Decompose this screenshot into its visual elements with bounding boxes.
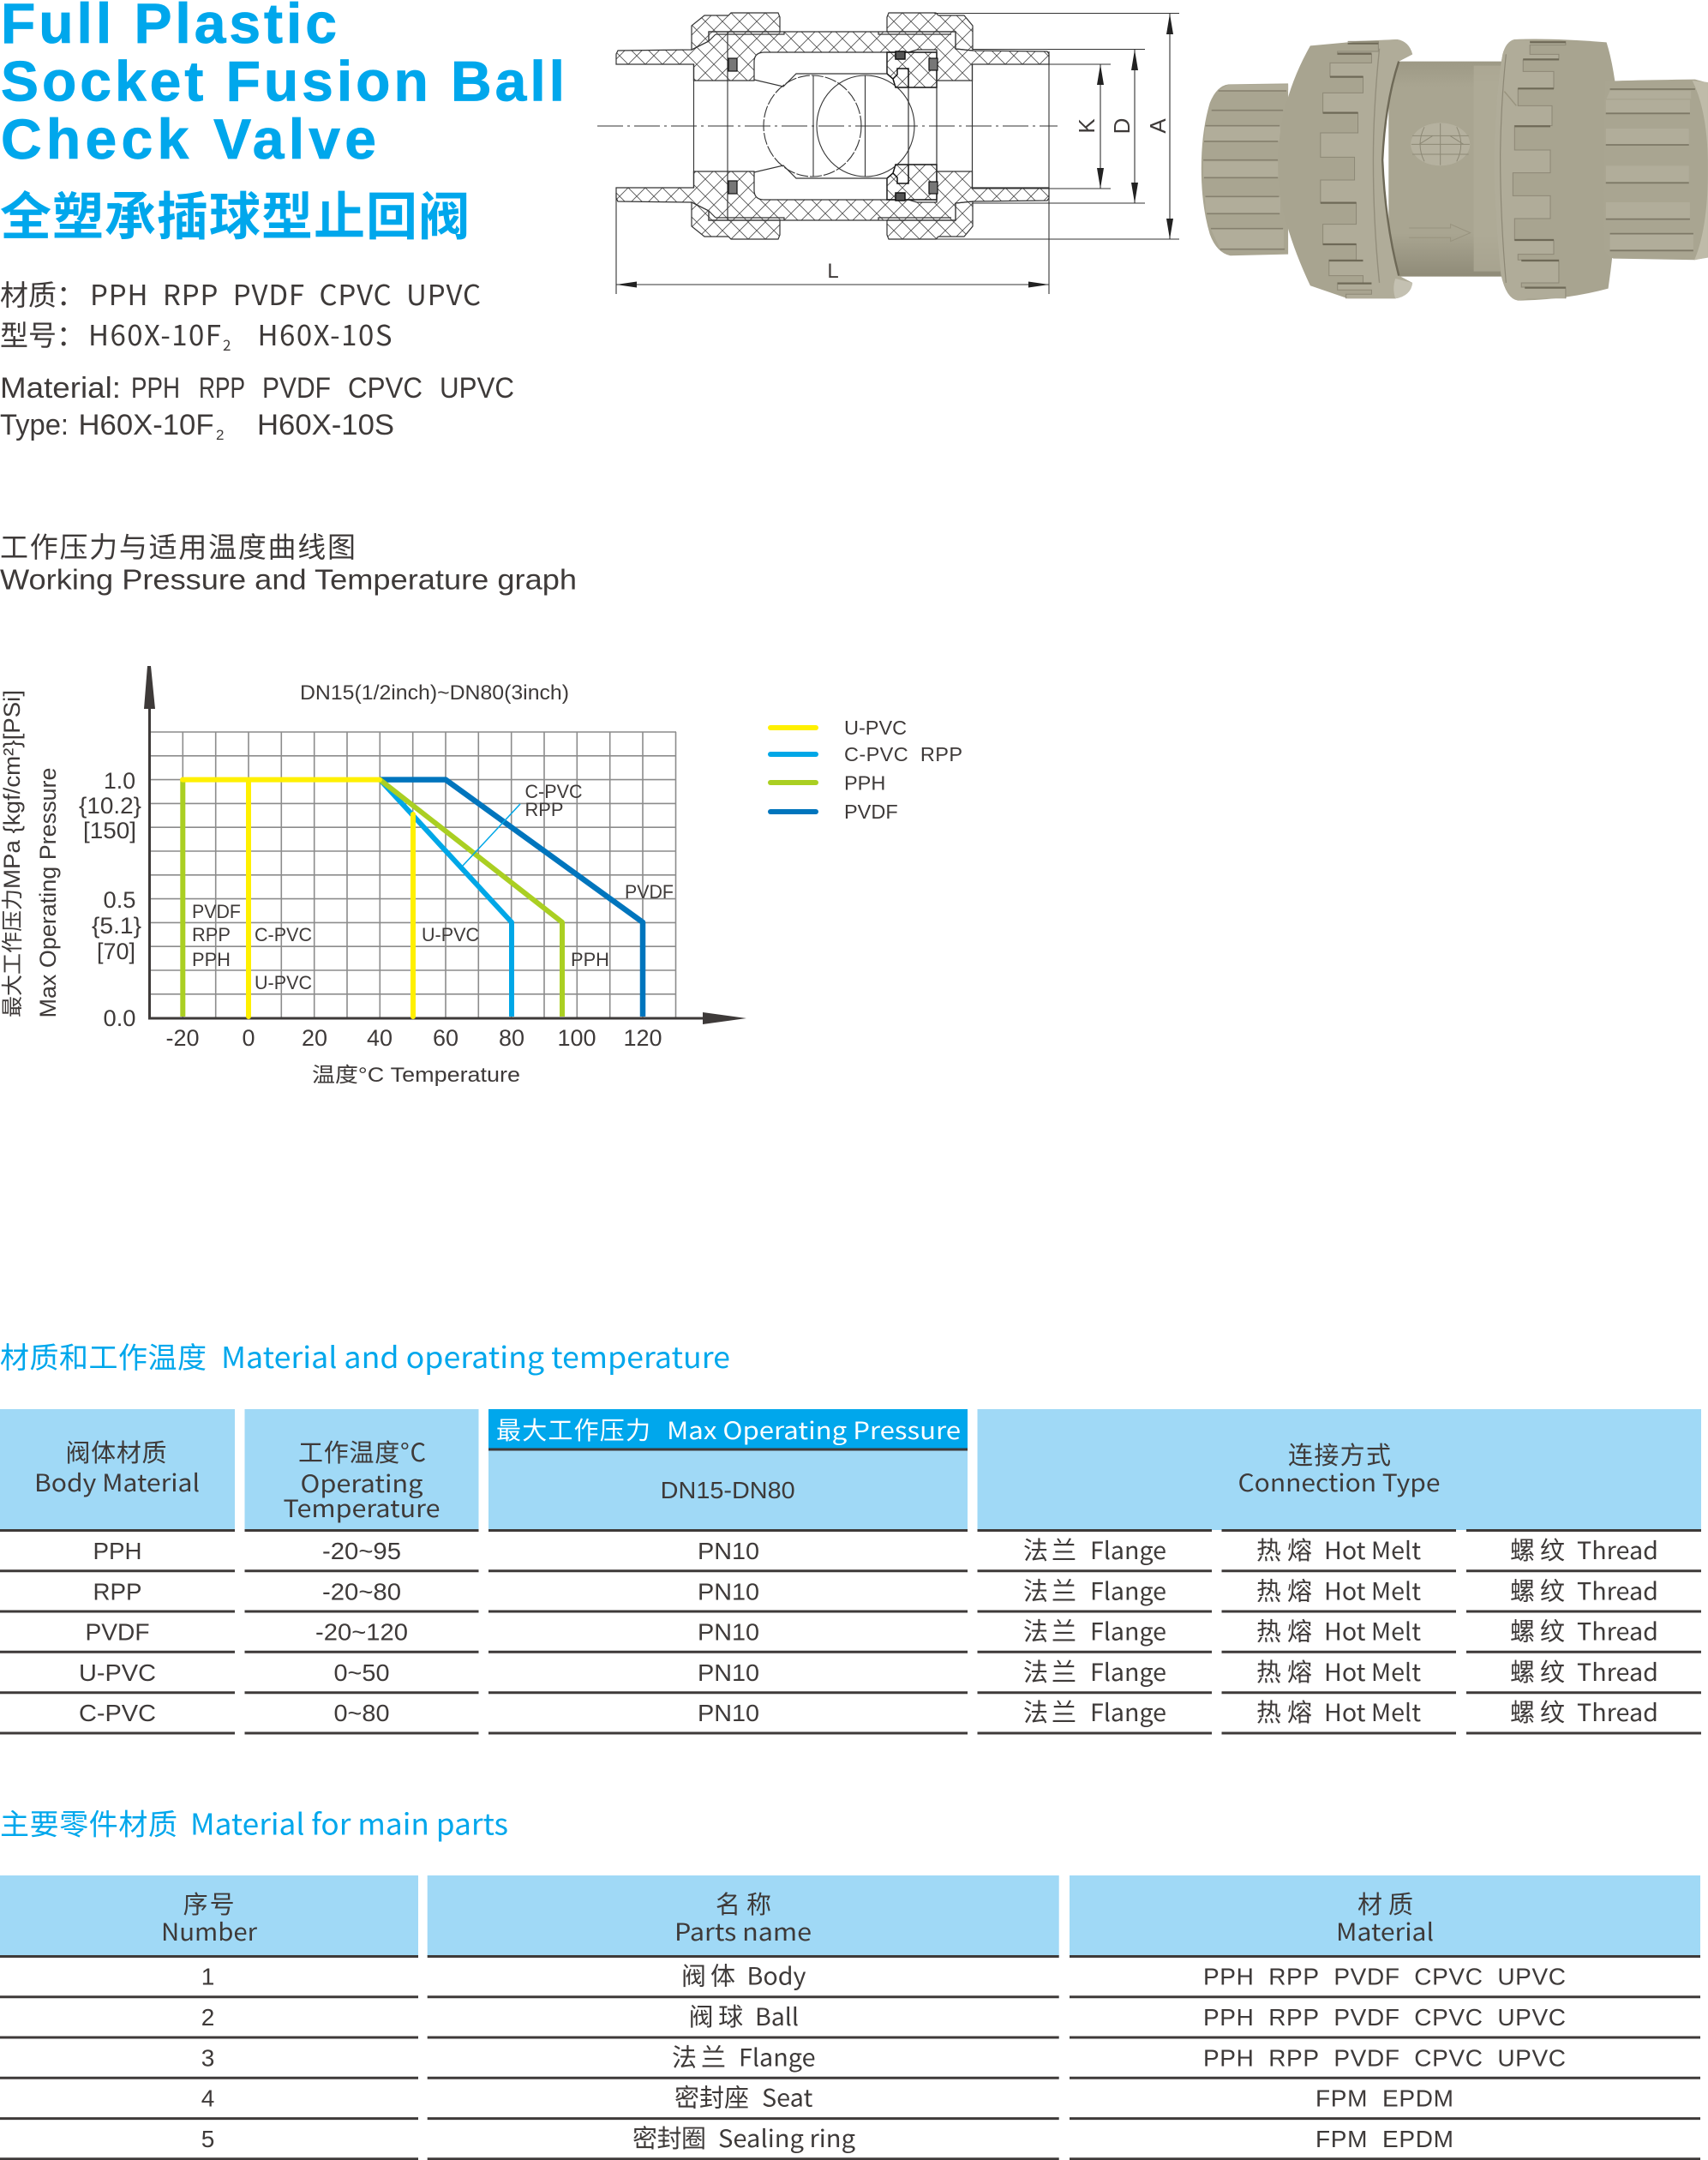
row: PPH: Hot Melt	[1324, 1533, 1421, 1567]
row: C-PVC: Thread	[1577, 1695, 1658, 1729]
row: PPH: Flange	[1090, 1533, 1166, 1567]
y axis ticks: [70]	[97, 939, 135, 964]
row: PVDF: Hot Melt	[1324, 1614, 1421, 1648]
row: RPP: Flange	[1090, 1573, 1166, 1607]
row: RPP: Thread	[1577, 1573, 1658, 1607]
heading: material and operating temperature: 材质和工作温度	[0, 1335, 207, 1377]
y axis ticks: 1.0	[104, 768, 135, 794]
row: U-PVC: 法兰	[1023, 1653, 1076, 1689]
material and type text: H60X-10F	[79, 409, 213, 441]
series: PVDF	[380, 780, 643, 1017]
x axis ticks: 60	[433, 1025, 458, 1051]
x axis ticks: 100	[557, 1025, 596, 1051]
row: C-PVC: Hot Melt	[1324, 1695, 1421, 1729]
part 3: Flange	[739, 2039, 816, 2073]
y axis ticks: 0.5	[103, 887, 135, 913]
dimension letters: D	[1109, 118, 1135, 134]
table: material and operating temperature	[0, 1409, 1701, 1733]
part 1: Body	[747, 1959, 806, 1993]
x axis ticks: -20	[165, 1025, 200, 1051]
row: PPH	[93, 1531, 1658, 1567]
logo	[1411, 123, 1470, 165]
row: PPH: 热熔	[1256, 1531, 1312, 1567]
row: U-PVC: Flange	[1090, 1654, 1166, 1689]
series: PPH	[183, 780, 562, 1017]
title: Check Valve	[1, 107, 376, 171]
material and type text: H60X-10S	[257, 313, 393, 354]
x axis ticks	[165, 1025, 662, 1051]
dimension letters: A	[1145, 118, 1171, 134]
header text: 连接方式	[1288, 1436, 1391, 1472]
part 4: 4	[201, 2085, 214, 2112]
row: PVDF: -20~120	[315, 1619, 408, 1646]
header text: 最大工作压力	[496, 1411, 650, 1447]
series: U-PVC	[183, 780, 413, 1017]
row: RPP: 螺纹	[1510, 1571, 1565, 1607]
x axis title: 温度°C Temperature	[312, 1064, 520, 1087]
row: RPP: PN10	[698, 1578, 759, 1605]
x axis ticks: 0	[242, 1025, 255, 1051]
row: PPH: Thread	[1577, 1533, 1658, 1567]
table: material for main parts	[0, 1875, 1700, 2159]
y axis ticks: {10.2}	[79, 793, 141, 819]
row: U-PVC: PN10	[698, 1659, 759, 1686]
line labels: C-PVC	[255, 924, 312, 945]
row: PPH: PPH	[93, 1538, 142, 1564]
line labels	[192, 781, 674, 993]
row: RPP: 法兰	[1023, 1571, 1076, 1607]
header text: 工作温度°C	[298, 1433, 426, 1469]
legend: U-PVC	[844, 717, 907, 739]
header text: 阀体材质	[65, 1433, 166, 1469]
row: U-PVC: Hot Melt	[1324, 1654, 1421, 1689]
title: Socket Fusion Ball	[1, 50, 565, 113]
y axis ticks: {5.1}	[92, 913, 141, 939]
parts header text: Parts name	[674, 1914, 812, 1948]
x axis ticks: 80	[499, 1025, 524, 1051]
row: C-PVC: 螺纹	[1510, 1693, 1565, 1729]
header text: Connection Type	[1238, 1465, 1440, 1499]
row: PPH: -20~95	[322, 1538, 401, 1564]
row: U-PVC: 螺纹	[1510, 1653, 1565, 1689]
dimension letters: L	[827, 260, 839, 283]
part 5: Sealing ring	[718, 2121, 855, 2155]
part 3: 法兰	[672, 2037, 726, 2073]
part 4: Seat	[762, 2080, 813, 2115]
part 3: 3	[201, 2044, 214, 2071]
row: U-PVC: Thread	[1577, 1654, 1658, 1689]
row: PVDF: 法兰	[1023, 1612, 1076, 1648]
row: PPH: 法兰	[1023, 1531, 1076, 1567]
line labels: PVDF	[625, 881, 674, 903]
table header fills	[0, 1409, 1701, 1530]
line labels: PPH	[192, 949, 231, 970]
material and type text: UPVC	[440, 372, 514, 405]
callout leader	[463, 804, 520, 866]
dimension letters	[827, 118, 1171, 283]
part 4: FPM EPDM	[1315, 2085, 1453, 2112]
heading: material and operating temperature: Material and operating temperature	[221, 1335, 730, 1377]
row: RPP: Hot Melt	[1324, 1573, 1421, 1607]
heading: material and operating temperature	[0, 1335, 730, 1377]
axes	[144, 666, 746, 1024]
row: PVDF: PN10	[698, 1619, 759, 1646]
row: PVDF: 热熔	[1256, 1612, 1312, 1648]
table rules	[0, 1449, 1701, 1733]
row: RPP: RPP	[93, 1578, 142, 1605]
parts table header fills	[0, 1875, 1700, 1956]
left nut	[1278, 39, 1412, 298]
header text: DN15-DN80	[661, 1477, 795, 1503]
graph heading	[0, 525, 577, 595]
technical drawing	[597, 13, 1179, 294]
part 3: PPH RPP PVDF CPVC UPVC	[1203, 2044, 1566, 2071]
dimension arrowheads	[616, 14, 1173, 288]
row: PVDF: Flange	[1090, 1614, 1166, 1648]
row: C-PVC: 0~80	[334, 1700, 389, 1726]
part 2: PPH RPP PVDF CPVC UPVC	[1203, 2004, 1566, 2031]
material and type text: 2	[223, 333, 231, 355]
legend: PPH	[844, 771, 885, 794]
centerline	[597, 125, 1058, 127]
x axis ticks: 40	[367, 1025, 393, 1051]
parts table rules	[0, 1956, 1700, 2159]
header text: Operating	[300, 1466, 423, 1500]
material and type text: H60X-10S	[257, 409, 394, 441]
part 1: PPH RPP PVDF CPVC UPVC	[1203, 1964, 1566, 1990]
chinese title: 全塑承插球型止回阀	[0, 176, 470, 250]
part 2: Ball	[755, 1999, 799, 2033]
x axis ticks: 120	[623, 1025, 662, 1051]
dimension letters: K	[1074, 118, 1100, 134]
row: C-PVC: 法兰	[1023, 1693, 1076, 1729]
line labels: C-PVC	[524, 781, 583, 802]
part 5: 密封圈	[632, 2119, 706, 2155]
row: PVDF	[86, 1612, 1658, 1648]
dimension lines	[616, 14, 1179, 294]
header text	[34, 1411, 1440, 1525]
legend: PVDF	[844, 801, 898, 823]
y axis ticks: 0.0	[103, 1005, 135, 1031]
part 4	[201, 2079, 1453, 2115]
part 1	[201, 1957, 1566, 1993]
product photo: valve	[1202, 39, 1708, 301]
row: PVDF: 螺纹	[1510, 1612, 1565, 1648]
legend: C-PVC RPP	[844, 743, 962, 765]
chart grid	[150, 732, 676, 1018]
parts header text: 材质	[1357, 1885, 1413, 1921]
graph heading: Working Pressure and Temperature graph	[0, 564, 577, 595]
parts header text	[161, 1885, 1434, 1948]
part 1: 1	[201, 1964, 214, 1990]
heading: material for main parts: 主要零件材质	[0, 1802, 177, 1843]
line labels: RPP	[192, 924, 231, 945]
graph heading: 工作压力与适用温度曲线图	[0, 525, 356, 566]
parts header text: Number	[161, 1914, 257, 1948]
part 2	[201, 1997, 1566, 2033]
row: U-PVC: 0~50	[334, 1659, 389, 1686]
row: RPP: -20~80	[322, 1578, 401, 1605]
line labels: PPH	[571, 949, 609, 970]
row: C-PVC: C-PVC	[79, 1700, 156, 1726]
row: RPP	[93, 1571, 1658, 1607]
material and type text: RPP	[199, 372, 245, 405]
part 4: 密封座	[674, 2079, 749, 2115]
part 5: FPM EPDM	[1315, 2126, 1453, 2152]
pressure strip	[488, 1409, 968, 1449]
series: C-PVC RPP	[380, 780, 512, 1017]
title	[1, 0, 565, 171]
line labels: RPP	[524, 799, 564, 820]
row: U-PVC	[79, 1653, 1658, 1689]
material and type text: CPVC	[348, 372, 423, 405]
row: C-PVC	[79, 1693, 1658, 1729]
right nut	[1494, 39, 1620, 301]
row: RPP: 热熔	[1256, 1571, 1312, 1607]
part 3	[201, 2037, 1566, 2073]
material and type text	[0, 273, 514, 443]
material and type text: Material:	[0, 372, 121, 405]
row: C-PVC: Flange	[1090, 1695, 1166, 1729]
y axis titles	[0, 690, 61, 1018]
row: PPH: 螺纹	[1510, 1531, 1565, 1567]
header text: Temperature	[283, 1491, 440, 1525]
line chart	[0, 666, 746, 1087]
material and type text: Type:	[0, 409, 69, 441]
row: C-PVC: 热熔	[1256, 1693, 1312, 1729]
material and type text: PPH	[131, 372, 180, 405]
material and type text: 材质：	[0, 273, 85, 314]
part 5: 5	[201, 2126, 214, 2152]
part 2: 阀球	[689, 1997, 743, 2033]
material and type text: 型号：	[0, 313, 85, 354]
y axis titles: Max Operating Pressure	[35, 768, 61, 1018]
header text: Body Material	[34, 1465, 200, 1499]
part 1: 阀体	[681, 1957, 735, 1993]
row: U-PVC: 热熔	[1256, 1653, 1312, 1689]
material and type text: H60X-10F	[88, 313, 221, 354]
y axis ticks: [150]	[83, 818, 136, 843]
row: PPH: PN10	[698, 1538, 759, 1564]
line labels: U-PVC	[422, 924, 479, 945]
material and type text: PPH RPP PVDF CPVC UPVC	[90, 273, 481, 314]
material and type text: PVDF	[262, 372, 331, 405]
part 5	[201, 2119, 1453, 2155]
line labels: U-PVC	[255, 972, 312, 993]
line labels: PVDF	[192, 901, 241, 922]
heading: material for main parts	[0, 1802, 508, 1843]
y axis ticks	[79, 768, 141, 1031]
ball	[694, 64, 914, 188]
parts header text: 名称	[716, 1885, 771, 1921]
left pipe end	[1202, 83, 1288, 255]
right pipe end	[1603, 80, 1708, 260]
row: PVDF: Thread	[1577, 1614, 1658, 1648]
heading: material for main parts: Material for main parts	[190, 1802, 508, 1843]
row: U-PVC: U-PVC	[79, 1659, 156, 1686]
header text: Max Operating Pressure	[667, 1413, 961, 1447]
part 2: 2	[201, 2004, 214, 2031]
body	[1388, 62, 1502, 277]
material and type text: 2	[216, 427, 224, 443]
x axis ticks: 20	[302, 1025, 327, 1051]
chart title: DN15(1/2inch)~DN80(3inch)	[300, 681, 569, 705]
row: PVDF: PVDF	[86, 1619, 149, 1646]
parts header text: 序号	[183, 1885, 235, 1921]
row: C-PVC: PN10	[698, 1700, 759, 1726]
flow arrow	[1409, 225, 1471, 242]
legend	[770, 717, 962, 823]
parts header text: Material	[1336, 1914, 1434, 1948]
